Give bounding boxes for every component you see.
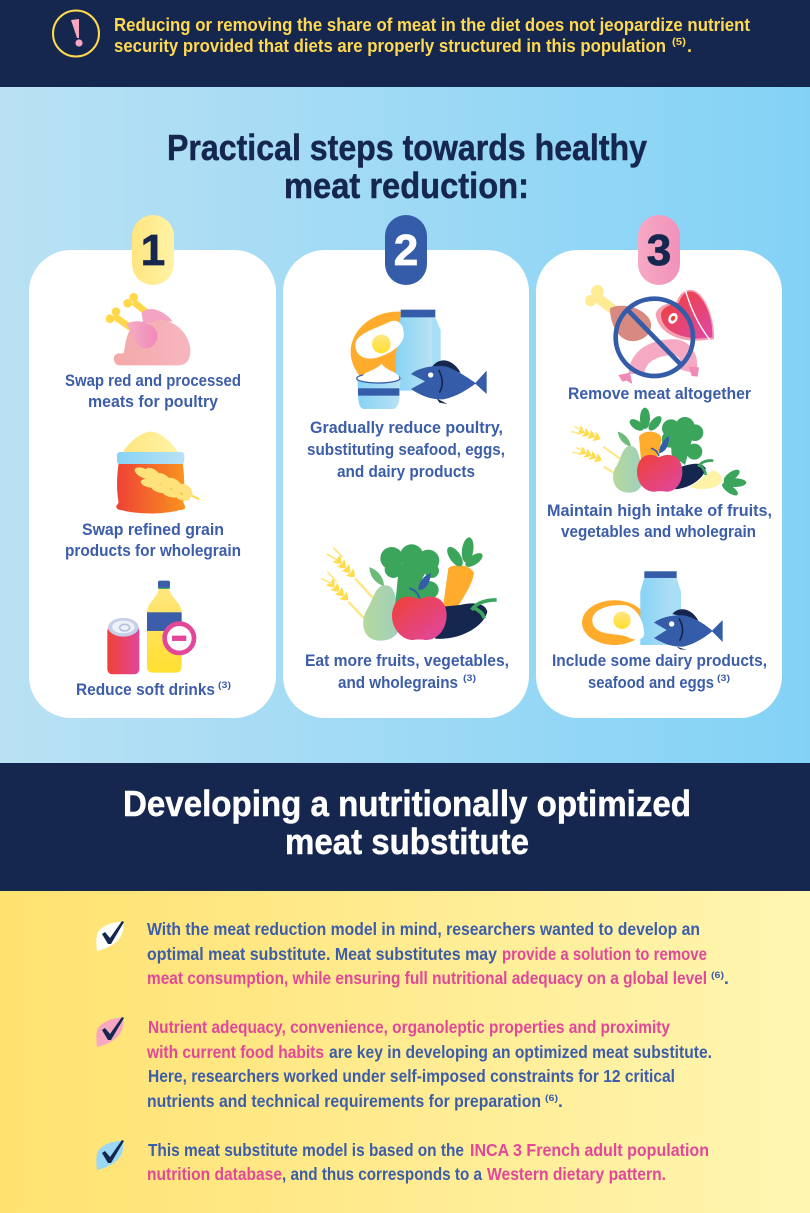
icon: egg, milk, yogurt and fish [351, 310, 487, 409]
text: swap red and processed meats: meats for poultry [88, 392, 219, 411]
banner text: (5) [672, 37, 686, 48]
heading: developing a meat substitute: meat substitute [285, 821, 529, 862]
text block: point 1: With the meat reduction model in mind, researchers wanted to develop an [147, 919, 700, 939]
text: swap refined grain: products for wholegrain [65, 541, 241, 560]
text block: point 2 [146, 1017, 712, 1111]
section heading band [0, 763, 810, 891]
text block: point 2: are key in developing an optimized meat substitute. [329, 1042, 712, 1062]
badge: number 1: 1 [141, 226, 165, 275]
text: swap refined grain: Swap refined grain [82, 520, 224, 539]
text: gradually reduce poultry [307, 418, 505, 481]
badge: number 3: 3 [647, 226, 671, 275]
icon: warning exclamation [53, 10, 99, 56]
banner text: . [687, 36, 692, 56]
icon: grain sack [116, 432, 199, 513]
badge: number 2 [385, 215, 427, 285]
text: gradually reduce poultry: Gradually reduce poultry, [310, 418, 503, 437]
icon: white check leaf [96, 921, 124, 951]
banner text: security provided that diets are properly structured in this population [114, 36, 666, 56]
icon: fruits, vegetables and wheat [321, 537, 497, 641]
heading: practical steps: meat reduction: [284, 165, 529, 206]
text: reduce soft drinks: (3) [218, 680, 231, 691]
panel: step 2 [283, 215, 529, 718]
panel: step 3 [536, 215, 782, 718]
text block: point 1 [147, 919, 729, 988]
badge: number 3 [638, 215, 680, 285]
text: maintain high intake: vegetables and wholegrain [561, 522, 756, 541]
icon: vegetables, fruit and wheat [571, 408, 746, 498]
text block: point 2: Here, researchers worked under self-imposed constraints for 12 critical [148, 1066, 675, 1086]
text: swap refined grain [65, 520, 241, 560]
heading: developing a meat substitute: Developing a nutritionally optimized [123, 783, 691, 824]
text: include some dairy: seafood and eggs [588, 673, 714, 692]
text block: point 1: meat consumption, while ensuring full nutritional adequacy on a global level [147, 968, 707, 988]
text block: point 2: . [558, 1091, 563, 1111]
icon: pink check leaf [96, 1017, 124, 1047]
text block: point 3: , and thus corresponds to a [282, 1164, 482, 1184]
text: include some dairy: (3) [717, 673, 730, 684]
heading: developing a meat substitute [123, 783, 691, 862]
text block: point 3: nutrition database [147, 1164, 282, 1184]
text block: point 1: provide a solution to remove [502, 944, 707, 964]
text: include some dairy: Include some dairy products, [552, 651, 767, 670]
text block: point 3 [147, 1140, 709, 1184]
text block: point 1: optimal meat substitute. Meat substitutes may [147, 944, 497, 964]
badge: number 1 [132, 215, 174, 285]
panel: step 1 [29, 215, 276, 718]
text block: point 2: nutrients and technical requirements for preparation [147, 1091, 541, 1111]
text: eat more fruits: Eat more fruits, vegetables, [305, 651, 509, 670]
text block: point 3: Western dietary pattern. [487, 1164, 666, 1184]
icon: egg, milk and fish [582, 571, 723, 650]
heading: practical steps: Practical steps towards healthy [167, 127, 647, 168]
panel: meat substitute points [0, 891, 810, 1213]
icon: roast chicken [106, 293, 190, 365]
text: include some dairy [552, 651, 767, 692]
heading: practical steps [167, 127, 647, 206]
text: maintain high intake: Maintain high intake of fruits, [547, 501, 772, 520]
text: eat more fruits: and wholegrains [338, 673, 458, 692]
text block: point 3: This meat substitute model is based on the [148, 1140, 464, 1160]
badge: number 2: 2 [394, 226, 418, 275]
text block: point 2: with current food habits [146, 1042, 324, 1062]
text: reduce soft drinks: Reduce soft drinks [76, 680, 215, 699]
icon: blue check leaf [96, 1140, 124, 1170]
text: swap red and processed meats: Swap red and processed [65, 371, 241, 390]
text block: point 1: . [724, 968, 729, 988]
text block: point 2: Nutrient adequacy, convenience, organoleptic properties and proximity [148, 1017, 670, 1037]
text: gradually reduce poultry: and dairy products [337, 462, 475, 481]
top banner [0, 0, 810, 87]
text: eat more fruits: (3) [463, 673, 476, 684]
icon: soft drinks [107, 581, 194, 674]
text block: point 1: (6) [711, 970, 724, 981]
panel: practical steps [0, 87, 810, 763]
text: maintain high intake [547, 501, 772, 541]
text: remove meat altogether: Remove meat altogether [568, 384, 751, 403]
banner text [114, 15, 750, 56]
icon: meat crossed out [585, 285, 714, 384]
text: swap red and processed meats [65, 371, 241, 411]
text block: point 2: (6) [545, 1093, 558, 1104]
text: gradually reduce poultry: substituting seafood, eggs, [307, 440, 505, 459]
text block: point 3: INCA 3 French adult population [470, 1140, 709, 1160]
banner text: Reducing or removing the share of meat in the diet does not jeopardize nutrient [114, 15, 750, 35]
text: eat more fruits [305, 651, 509, 692]
